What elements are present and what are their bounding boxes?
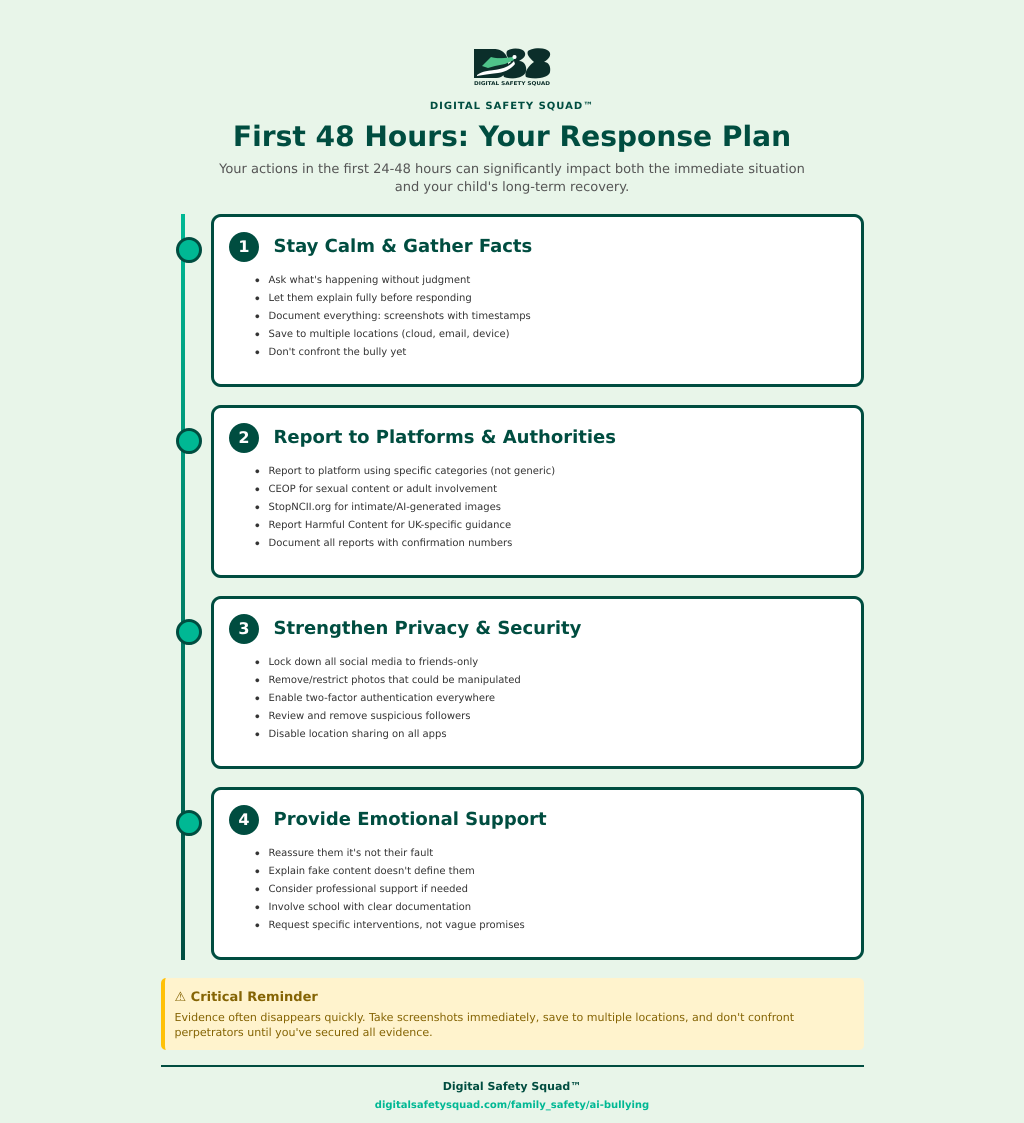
list: step 2	[255, 466, 555, 549]
list: step 1: Document everything: screenshots with timestamps	[268, 311, 531, 322]
panel: step 3	[211, 596, 864, 769]
step number 4: 4	[238, 810, 250, 829]
list: step 4: Consider professional support if needed	[268, 884, 468, 895]
list: step 4: Reassure them it's not their fault	[268, 848, 433, 859]
step number 2	[229, 423, 259, 453]
logo: DIGITAL SAFETY SQUAD	[474, 81, 551, 87]
panel: step 4	[211, 787, 864, 960]
callout text	[174, 1011, 794, 1039]
list: step 1: Let them explain fully before responding	[268, 293, 472, 304]
subtitle: and your child's long-term recovery.	[395, 180, 629, 195]
list: step 2: Report to platform using specific categories (not generic)	[268, 466, 555, 477]
brand name: DIGITAL SAFETY SQUAD™	[430, 101, 594, 112]
timeline marker 4	[176, 810, 202, 836]
list: step 2: Document all reports with confirmation numbers	[268, 538, 512, 549]
list: step 1	[255, 275, 531, 358]
callout text: perpetrators until you've secured all evidence.	[174, 1026, 433, 1039]
callout: critical reminder	[161, 978, 864, 1050]
step number 3	[229, 614, 259, 644]
list: step 4: Involve school with clear documentation	[268, 902, 471, 913]
list: step 1: Save to multiple locations (cloud, email, device)	[268, 329, 510, 340]
list: step 2: StopNCII.org for intimate/AI-generated images	[268, 502, 501, 513]
panel: step 2	[211, 405, 864, 578]
list: step 3: Review and remove suspicious followers	[268, 711, 470, 722]
heading: step 1: Stay Calm & Gather Facts	[274, 236, 532, 257]
list: step 2: CEOP for sexual content or adult involvement	[268, 484, 497, 495]
list: step 2: Report Harmful Content for UK-specific guidance	[268, 520, 511, 531]
list: step 3: Disable location sharing on all apps	[268, 729, 447, 740]
step number 2: 2	[238, 428, 250, 447]
footer rule	[161, 1065, 864, 1067]
timeline marker 3	[176, 619, 202, 645]
step number 1: 1	[238, 237, 250, 256]
list: step 3: Enable two-factor authentication everywhere	[268, 693, 495, 704]
timeline line	[181, 214, 185, 960]
list: step 1: Ask what's happening without judgment	[268, 275, 470, 286]
timeline marker 2	[176, 428, 202, 454]
step number 4	[229, 805, 259, 835]
list: step 4	[255, 848, 525, 931]
callout heading: ⚠ Critical Reminder	[174, 990, 318, 1005]
step number 3: 3	[238, 619, 250, 638]
subtitle: Your actions in the first 24-48 hours can significantly impact both the immediate situation	[219, 162, 805, 177]
title: First 48 Hours: Your Response Plan	[233, 120, 791, 153]
heading: step 3: Strengthen Privacy & Security	[274, 618, 581, 639]
list: step 3	[255, 657, 521, 740]
list: step 3: Remove/restrict photos that could be manipulated	[268, 675, 521, 686]
timeline marker 1	[176, 237, 202, 263]
list: step 3: Lock down all social media to friends-only	[268, 657, 478, 668]
subtitle	[219, 162, 805, 195]
callout text: Evidence often disappears quickly. Take screenshots immediately, save to multiple locations, and don't confront	[174, 1011, 794, 1024]
panel: step 1	[211, 214, 864, 387]
list: step 4: Explain fake content doesn't define them	[268, 866, 475, 877]
logo	[474, 48, 551, 87]
heading: step 2: Report to Platforms & Authorities	[274, 427, 616, 448]
footer name: Digital Safety Squad™	[443, 1080, 581, 1093]
list: step 4: Request specific interventions, not vague promises	[268, 920, 525, 931]
footer link: digitalsafetysquad.com/family_safety/ai-bullying	[375, 1100, 649, 1111]
heading: step 4: Provide Emotional Support	[274, 809, 547, 830]
list: step 1: Don't confront the bully yet	[268, 347, 406, 358]
step number 1	[229, 232, 259, 262]
